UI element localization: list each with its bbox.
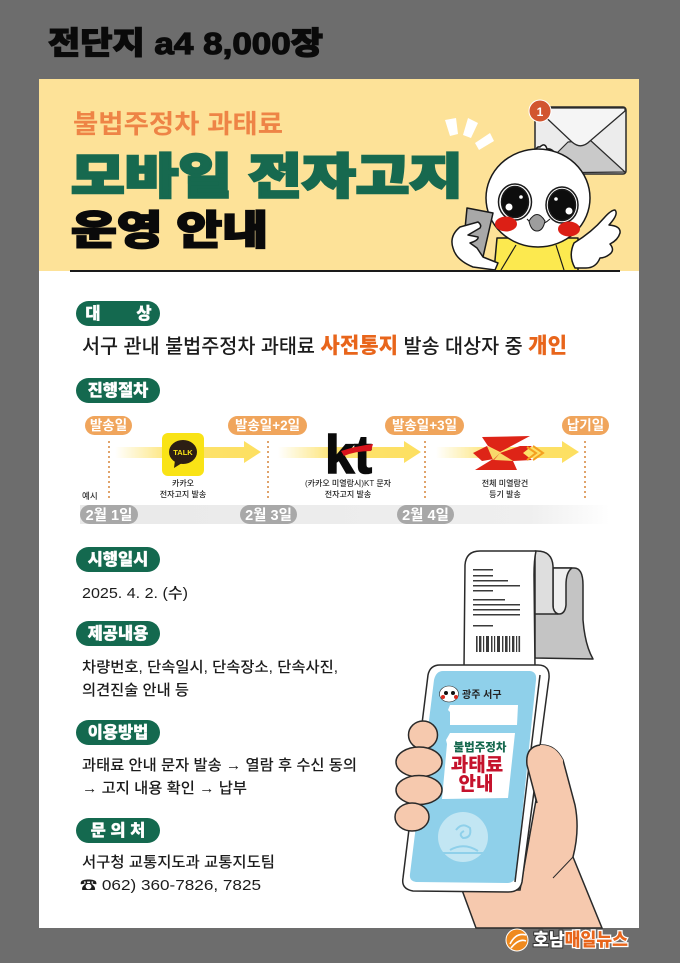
icon: kakao talk	[162, 433, 204, 476]
section: process timeline	[76, 378, 610, 524]
message bubble notice: 불법주정차	[454, 740, 507, 754]
main title: 모바일 전자고지	[71, 151, 463, 204]
secondary title: 운영 안내	[71, 209, 268, 253]
news logo: 호남매일뉴스	[533, 930, 628, 950]
section: provided content	[76, 621, 338, 699]
section: target	[76, 301, 567, 358]
target text: 서구 관내 불법주정차 과태료 사전통지 발송 대상자 중 개인	[82, 334, 567, 358]
label: 발송일+3일	[385, 416, 464, 435]
icon: envelope	[535, 107, 626, 174]
caption: registered mail: 전체 미열람건	[482, 478, 528, 488]
pill heading: 대	[85, 304, 101, 323]
pill heading: 상	[136, 304, 152, 323]
small mascot logo	[440, 686, 458, 702]
panel: header band	[39, 79, 639, 272]
date: 2월 4일: 2월 4일	[402, 507, 449, 524]
method text: → 고지 내용 확인 → 납부	[82, 780, 247, 797]
pill heading: 진행절차	[88, 381, 148, 400]
pill heading	[76, 301, 160, 326]
section: contact	[76, 818, 275, 894]
pill heading	[76, 621, 160, 646]
caption: kt: (카카오 미열람시)KT 문자	[305, 478, 392, 488]
caption: kakao	[160, 479, 206, 499]
label: 발송일+2일: 발송일+2일	[235, 418, 300, 433]
fingers	[395, 721, 442, 831]
pill heading: 시행일시	[88, 550, 148, 569]
panel: poster	[39, 79, 639, 928]
method text: 과태료 안내 문자 발송 → 열람 후 수신 동의	[82, 757, 357, 774]
content text	[82, 659, 338, 699]
contact text: ☎ 062) 360-7826, 7825	[80, 877, 261, 894]
date: 2월 1일: 2월 1일	[86, 507, 132, 524]
caption: registered mail: 등기 발송	[489, 489, 521, 499]
phone edge line	[515, 675, 540, 882]
label: 발송일+3일: 발송일+3일	[392, 418, 457, 433]
date: 2월 3일	[240, 505, 297, 524]
contact text: 서구청 교통지도과 교통지도팀	[82, 854, 275, 871]
message bubble notice: 과태료	[451, 754, 503, 776]
label: 발송일: 발송일	[90, 418, 127, 433]
icon: post office logo	[473, 436, 543, 470]
label: 발송일+2일	[228, 416, 307, 435]
section: how to use	[76, 720, 357, 797]
caption: kt: 전자고지 발송	[325, 489, 371, 499]
palm crease	[553, 857, 573, 878]
label: 납기일: 납기일	[567, 418, 604, 433]
pale district emblem	[438, 812, 488, 862]
content text: 차량번호, 단속일시, 단속장소, 단속사진,	[82, 659, 338, 676]
pill heading: 제공내용	[88, 624, 148, 643]
receipt lines and barcode	[473, 569, 520, 652]
pill heading	[76, 818, 160, 843]
section: start date	[76, 547, 188, 602]
date: 2월 1일	[80, 505, 138, 524]
date bar	[80, 505, 610, 524]
phone screen	[410, 671, 536, 883]
example label: 예시	[82, 491, 98, 501]
news logo	[506, 929, 628, 951]
divider line	[70, 270, 620, 272]
timeline arrows	[115, 441, 579, 463]
phone body	[403, 665, 549, 892]
caption: registered mail	[482, 478, 528, 499]
thumb over phone edge	[527, 745, 563, 805]
icon: kt logo: kt	[325, 425, 372, 485]
message bubble notice: 안내	[459, 773, 493, 795]
dotted markers	[109, 441, 585, 500]
district label: 광주 서구	[462, 688, 502, 701]
icon: sparkles	[445, 118, 494, 150]
content text: 의견진술 안내 등	[82, 682, 189, 699]
icon: notification badge	[529, 100, 551, 122]
illustration: hand holding phone with receipt	[395, 551, 602, 928]
icon: notification badge: 1	[537, 105, 544, 119]
message bubble notice	[442, 733, 515, 799]
pill heading: 이용방법	[88, 723, 148, 742]
caption: kt	[305, 478, 392, 499]
label: 발송일	[85, 416, 132, 435]
caption: kakao: 카카오	[172, 479, 194, 488]
arm and palm	[462, 745, 602, 928]
pill heading: 문 의 처	[91, 821, 145, 840]
icon: kakao talk: TALK	[173, 448, 193, 457]
top title: 전단지 a4 8,000장	[48, 26, 323, 61]
caption: kakao: 전자고지 발송	[160, 489, 206, 499]
date: 2월 3일: 2월 3일	[245, 507, 292, 524]
pill heading	[76, 378, 160, 403]
pill heading	[76, 720, 160, 745]
contact text	[80, 854, 275, 894]
subtitle: 불법주정차 과태료	[73, 109, 283, 139]
message bubble blank	[448, 705, 518, 725]
date: 2월 4일	[397, 505, 454, 524]
receipt roll	[464, 551, 593, 668]
label: 납기일	[562, 416, 609, 435]
mascot	[452, 145, 620, 271]
date text: 2025. 4. 2. (수)	[82, 585, 188, 602]
method text	[82, 757, 357, 797]
